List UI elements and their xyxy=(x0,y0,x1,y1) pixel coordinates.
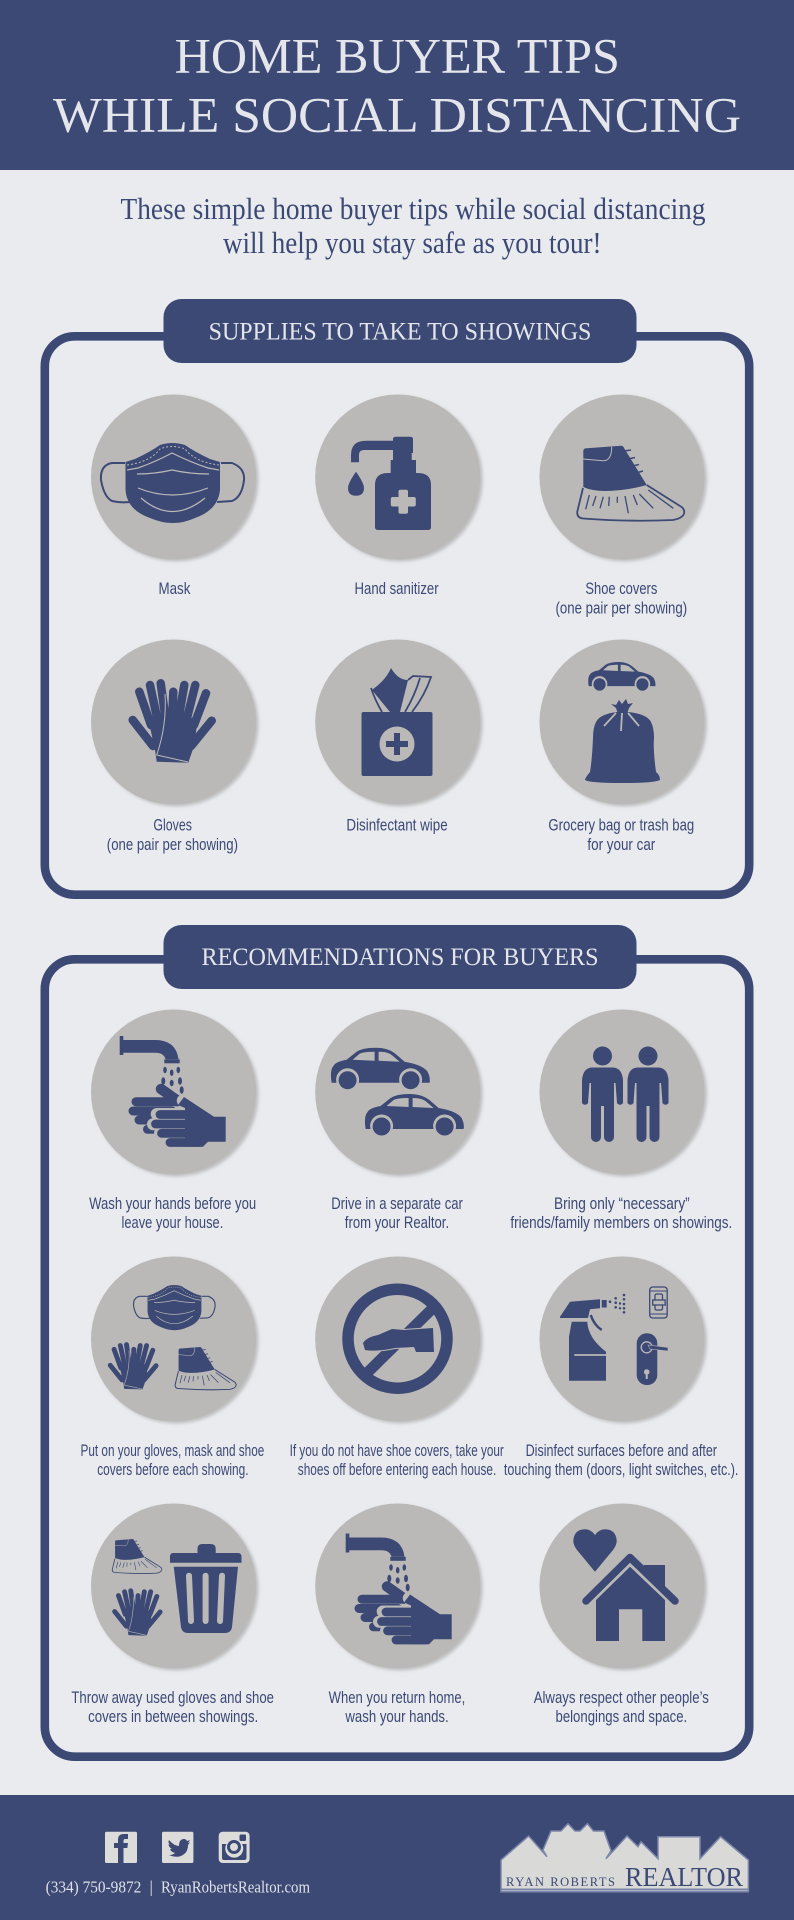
icon: hand sanitizer xyxy=(315,394,480,560)
icon: disinfectant wipe xyxy=(315,640,480,804)
label: necessary people xyxy=(510,1194,732,1232)
label: shoes off: If you do not have shoe covers, take your xyxy=(290,1441,504,1460)
label: throw away: covers in between showings. xyxy=(88,1707,258,1726)
label: return home: wash your hands. xyxy=(345,1707,449,1726)
label: wash hands: Wash your hands before you xyxy=(89,1194,256,1213)
label: put on gear xyxy=(80,1441,264,1479)
label: disinfectant wipe: Disinfectant wipe xyxy=(346,816,448,835)
label: throw away xyxy=(71,1688,274,1726)
icon: shoe covers xyxy=(540,394,704,560)
icon: gloves xyxy=(91,640,256,804)
footer banner xyxy=(0,1795,794,1920)
logo: ryan roberts realtor: RYAN ROBERTS xyxy=(506,1875,615,1889)
label: gloves xyxy=(107,816,238,854)
label: respect belongings xyxy=(534,1688,709,1726)
label: separate car: from your Realtor. xyxy=(345,1213,449,1232)
title: HOME BUYER TIPS xyxy=(175,28,620,84)
heading pill: supplies: SUPPLIES TO TAKE TO SHOWINGS xyxy=(209,318,591,345)
label: separate car: Drive in a separate car xyxy=(331,1194,463,1213)
label: mask: Mask xyxy=(158,579,191,598)
icon: wash hands xyxy=(91,1010,256,1174)
intro text xyxy=(120,191,706,260)
heading pill: recommendations: RECOMMENDATIONS FOR BUYERS xyxy=(202,944,598,971)
label: gloves: (one pair per showing) xyxy=(107,835,238,854)
label: return home: When you return home, xyxy=(329,1688,465,1707)
label: respect belongings: Always respect other people’s xyxy=(534,1688,709,1707)
logo: ryan roberts realtor: REALTOR xyxy=(625,1862,743,1892)
contact line: RyanRobertsRealtor.com xyxy=(161,1878,310,1897)
label: return home xyxy=(329,1688,465,1726)
label: necessary people: Bring only “necessary” xyxy=(554,1194,690,1213)
label: throw away: Throw away used gloves and shoe xyxy=(71,1688,274,1707)
icon: two people xyxy=(540,1010,704,1174)
label: disinfect surfaces: Disinfect surfaces before and after xyxy=(526,1441,717,1460)
icon: mask xyxy=(91,394,256,560)
icon: shoe cover, gloves and trash can xyxy=(91,1504,256,1668)
icon: mask, gloves and shoe cover xyxy=(91,1256,256,1422)
icon: wash hands on return xyxy=(315,1504,480,1668)
label: grocery bag: for your car xyxy=(587,835,656,854)
contact line: (334) 750-9872 xyxy=(46,1878,141,1897)
icon: car and bag xyxy=(540,640,704,804)
label: put on gear: covers before each showing. xyxy=(97,1460,249,1479)
label: respect belongings: belongings and space. xyxy=(556,1707,687,1726)
label: grocery bag xyxy=(548,816,694,854)
heading pill: recommendations xyxy=(164,925,636,989)
contact line: | xyxy=(150,1878,153,1897)
label: wash hands xyxy=(89,1194,256,1232)
label: put on gear: Put on your gloves, mask and shoe xyxy=(80,1441,264,1460)
icon: facebook xyxy=(105,1832,137,1863)
icon: instagram xyxy=(219,1832,250,1863)
label: necessary people: friends/family members on showings. xyxy=(510,1213,732,1232)
label: disinfect surfaces xyxy=(504,1441,738,1479)
label: shoe covers xyxy=(556,579,687,618)
logo: ryan roberts realtor xyxy=(501,1824,748,1892)
heading pill: supplies xyxy=(164,299,636,363)
label: grocery bag: Grocery bag or trash bag xyxy=(548,816,694,835)
label: wash hands: leave your house. xyxy=(122,1213,223,1232)
icon: twitter xyxy=(162,1832,193,1863)
label: gloves: Gloves xyxy=(153,816,192,835)
intro text: will help you stay safe as you tour! xyxy=(223,225,602,260)
title xyxy=(53,28,741,143)
icon: heart and house xyxy=(540,1504,704,1668)
label: separate car xyxy=(331,1194,463,1232)
panel: supplies to take to showings xyxy=(45,299,749,895)
label: hand sanitizer: Hand sanitizer xyxy=(354,579,439,598)
header banner xyxy=(0,0,794,170)
icon: spray, switch and door handle xyxy=(540,1256,704,1422)
panel: recommendations for buyers xyxy=(45,925,749,1757)
label: shoe covers: (one pair per showing) xyxy=(556,598,687,618)
intro text: These simple home buyer tips while social distancing xyxy=(120,191,706,226)
contact line xyxy=(46,1878,310,1897)
label: shoes off: shoes off before entering each house. xyxy=(298,1460,496,1479)
label: shoe covers: Shoe covers xyxy=(585,579,657,598)
icon: two cars xyxy=(315,1010,480,1174)
label: shoes off xyxy=(290,1441,504,1479)
title: WHILE SOCIAL DISTANCING xyxy=(53,87,741,143)
icon: no shoes xyxy=(315,1256,480,1422)
